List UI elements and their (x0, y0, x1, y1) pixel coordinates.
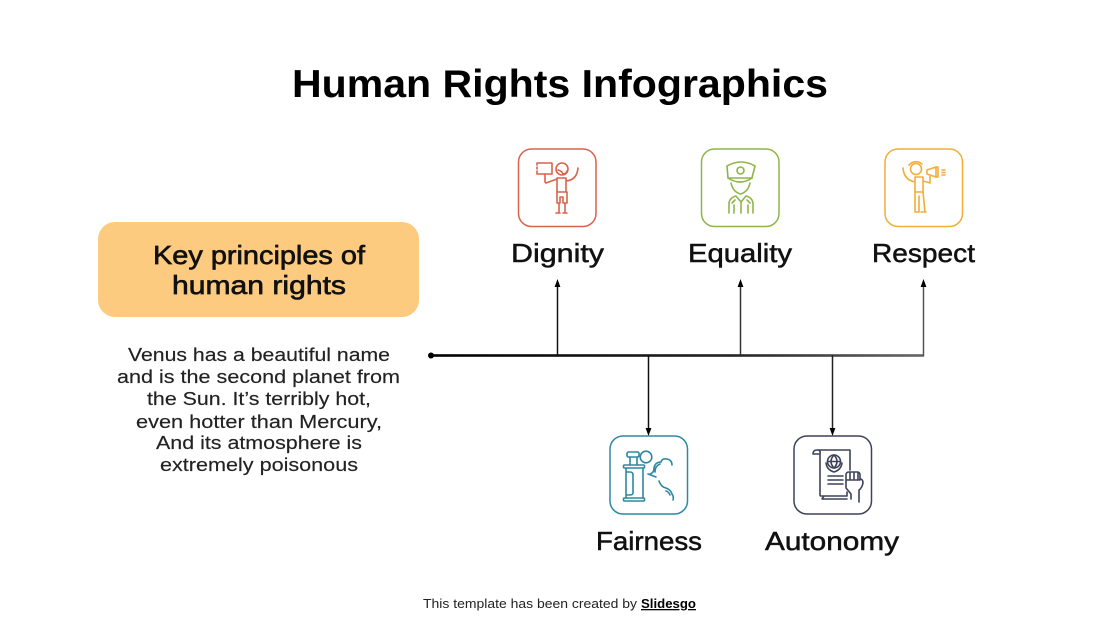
label: Respect: Respect (872, 238, 976, 268)
connector diagram (428, 279, 926, 436)
panel: key principles (98, 222, 419, 317)
label: Dignity: Dignity (511, 238, 604, 268)
text block: description (117, 345, 400, 475)
panel heading: human rights (172, 270, 346, 300)
title: Human Rights Infographics (292, 63, 828, 106)
text block: description: And its atmosphere is (156, 433, 362, 453)
arrow: to Autonomy (830, 355, 835, 436)
panel heading: Key principles of (153, 240, 366, 270)
label: Autonomy: Autonomy (765, 526, 899, 556)
icon: autonomy, scroll and fist (794, 436, 872, 514)
icon: equality, officer (702, 149, 779, 226)
text block: description: Venus has a beautiful name (128, 345, 390, 365)
icon: respect, person with megaphone (885, 149, 962, 226)
text block: description: the Sun. It’s terribly hot, (147, 389, 371, 409)
text block: description: extremely poisonous (160, 455, 358, 475)
arrow: to Equality (738, 279, 743, 355)
label: Fairness: Fairness (596, 526, 702, 556)
arrow: to Fairness (646, 355, 651, 436)
main horizontal line (431, 354, 924, 357)
label: Equality: Equality (688, 238, 792, 268)
icon: dignity, person holding sign (518, 149, 596, 226)
icon: fairness, water cannon (610, 436, 688, 514)
footer credit: This template has been created by (423, 596, 638, 611)
arrow: to Dignity (555, 279, 560, 355)
start dot (428, 352, 434, 358)
text block: description: even hotter than Mercury, (136, 412, 382, 432)
panel heading (153, 240, 366, 300)
text block: description: and is the second planet from (117, 367, 400, 387)
footer credit: Slidesgo (641, 596, 696, 611)
arrow: to Respect (921, 279, 926, 356)
